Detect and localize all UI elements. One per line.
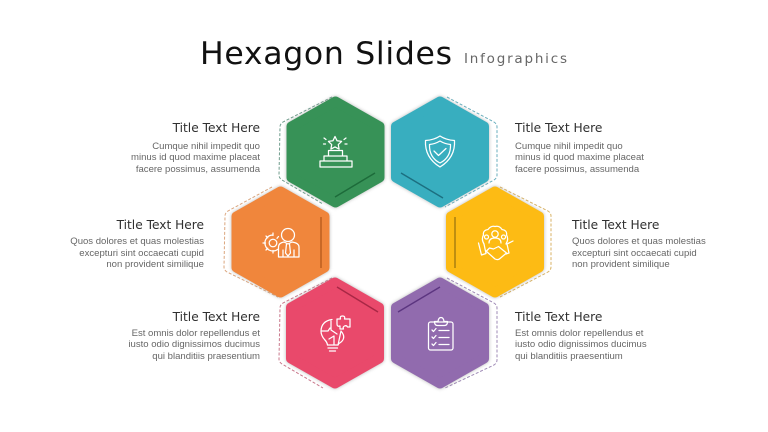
text block: bottom left: qui blanditiis praesentium: [152, 351, 260, 362]
text block: middle right: Quos dolores et quas molestias: [572, 236, 706, 247]
text block: bottom right: iusto odio dignissimos ducimus: [515, 339, 647, 350]
text block: top right: [514, 121, 644, 175]
icon: handshake and team gear: [478, 226, 513, 260]
hexagon: purple: [396, 278, 497, 388]
text block: bottom right: [514, 310, 647, 362]
text block: bottom left: [128, 310, 260, 362]
icon: shield with check: [425, 136, 455, 167]
text block: top left: Title Text Here: [172, 121, 260, 135]
text block: middle left: [70, 218, 204, 270]
hexagon: orange: [224, 187, 324, 297]
hexagon: pink: [279, 278, 379, 388]
text block: middle right: excepturi sint occaecati cupid: [572, 248, 697, 259]
text block: top left: facere possimus, assumenda: [136, 164, 261, 175]
icon: light bulb puzzle: [321, 316, 350, 351]
text block: middle left: Title Text Here: [116, 218, 204, 232]
title: Hexagon Slides: [200, 36, 452, 72]
text block: bottom left: Title Text Here: [172, 310, 260, 324]
text block: top right: Title Text Here: [514, 121, 602, 135]
hexagon: teal: [396, 97, 497, 207]
text block: top left: Cumque nihil impedit quo: [152, 141, 260, 152]
text block: top right: Cumque nihil impedit quo: [515, 141, 623, 152]
text block: top right: facere possimus, assumenda: [515, 164, 640, 175]
text block: top left: minus id quod maxime placeat: [131, 152, 260, 163]
text block: top right: minus id quod maxime placeat: [515, 152, 644, 163]
text block: middle left: Quos dolores et quas molestias: [70, 236, 204, 247]
text block: bottom right: Est omnis dolor repellendus et: [515, 328, 644, 339]
text block: bottom left: Est omnis dolor repellendus et: [132, 328, 260, 339]
text block: middle right: Title Text Here: [571, 218, 659, 232]
hexagon: yellow: [451, 187, 551, 297]
subtitle: Infographics: [464, 51, 567, 67]
text block: bottom right: Title Text Here: [514, 310, 602, 324]
hexagon: green: [279, 97, 380, 204]
icon: checklist clipboard: [428, 318, 453, 350]
icon: podium with star: [320, 136, 352, 167]
icon: person with gear: [263, 228, 299, 257]
text block: middle right: non provident similique: [572, 259, 670, 270]
text block: middle left: non provident similique: [106, 259, 204, 270]
text block: bottom right: qui blanditiis praesentium: [515, 351, 623, 362]
text block: middle right: [571, 218, 706, 270]
text block: bottom left: iusto odio dignissimos ducimus: [128, 339, 260, 350]
text block: middle left: excepturi sint occaecati cupid: [79, 248, 204, 259]
text block: top left: [131, 121, 261, 175]
